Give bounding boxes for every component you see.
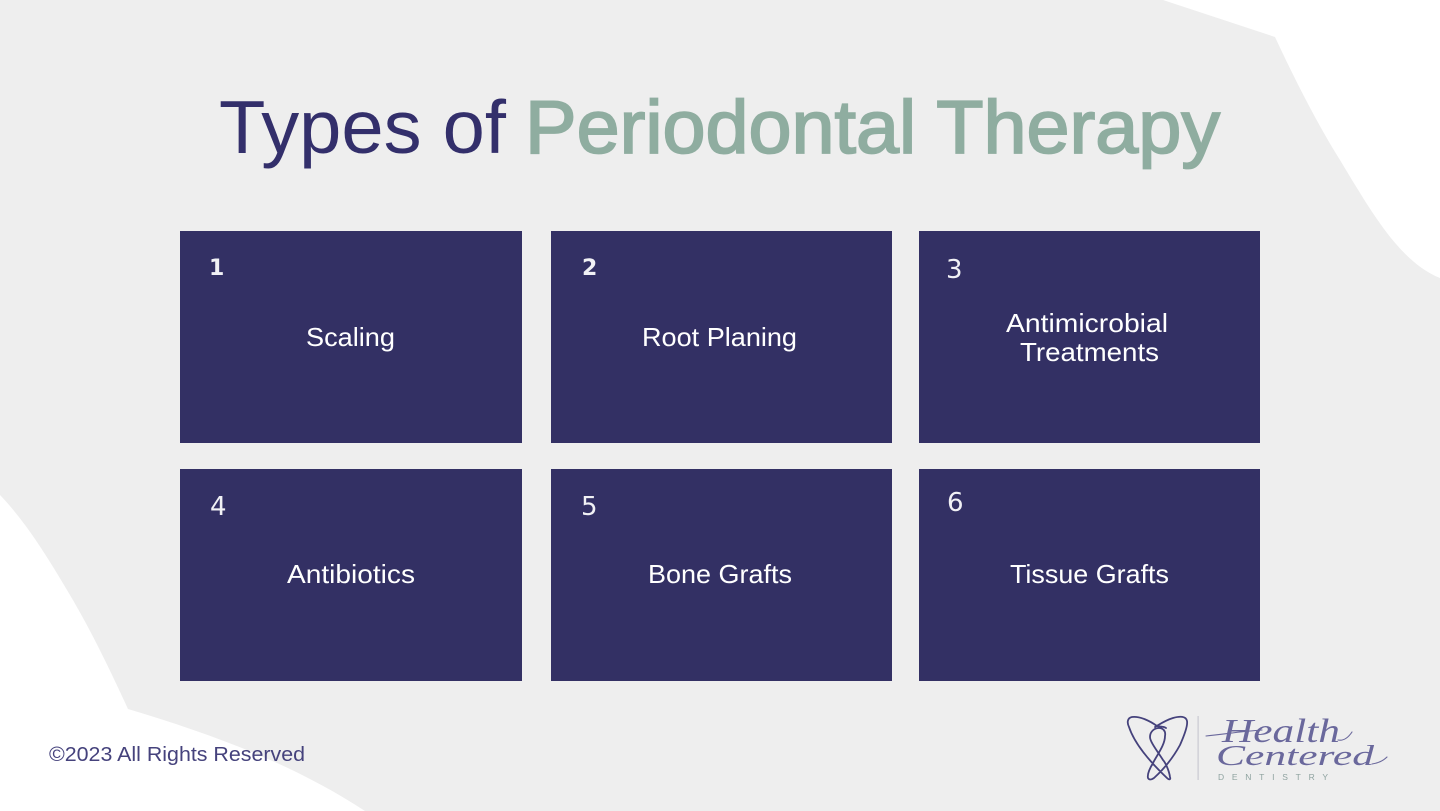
panel 6: Tissue Grafts: Tissue Grafts [1010, 559, 1169, 589]
panel 6: Tissue Grafts [919, 469, 1260, 681]
panel 1: Scaling [180, 231, 522, 443]
footer copyright: ©2023 All Rights Reserved [49, 744, 305, 766]
panel 5: Bone Grafts: Bone Grafts [648, 559, 792, 589]
background shape: bottom left white corner [0, 495, 365, 811]
wordmark: Centered: Centered [1216, 741, 1376, 772]
panel 2: Root Planing: 2 [582, 256, 597, 281]
icon: tooth [1128, 717, 1187, 780]
panel 4: Antibiotics: 4 [210, 492, 227, 522]
panel 3: Antimicrobial Treatments: Antimicrobial [1006, 308, 1168, 338]
panel 1: Scaling: 1 [209, 256, 224, 281]
panel 3: Antimicrobial Treatments [919, 231, 1260, 443]
title: Periodontal Therapy [525, 85, 1221, 169]
swash on Health [1206, 730, 1352, 740]
wordmark: Health: Health [1221, 713, 1340, 750]
background shape: top right white corner [1163, 0, 1440, 278]
logo: Health Centered Dentistry [1128, 713, 1387, 782]
panel 2: Root Planing [551, 231, 892, 443]
panel 6: Tissue Grafts: 6 [947, 488, 964, 518]
panel 5: Bone Grafts: 5 [581, 492, 598, 522]
wordmark: Dentistry: DENTISTRY [1218, 772, 1328, 782]
swash on Centered [1372, 757, 1387, 764]
title: Types of [219, 85, 506, 169]
panel 5: Bone Grafts [551, 469, 892, 681]
panel 4: Antibiotics: Antibiotics [287, 559, 415, 589]
panel 3: Antimicrobial Treatments: Treatments [1020, 337, 1159, 367]
panel 1: Scaling: Scaling [306, 322, 395, 352]
title [219, 85, 1221, 169]
panel 2: Root Planing: Root Planing [642, 322, 797, 352]
divider [1198, 716, 1199, 780]
panel 3: Antimicrobial Treatments: 3 [946, 255, 963, 285]
panel 4: Antibiotics [180, 469, 522, 681]
